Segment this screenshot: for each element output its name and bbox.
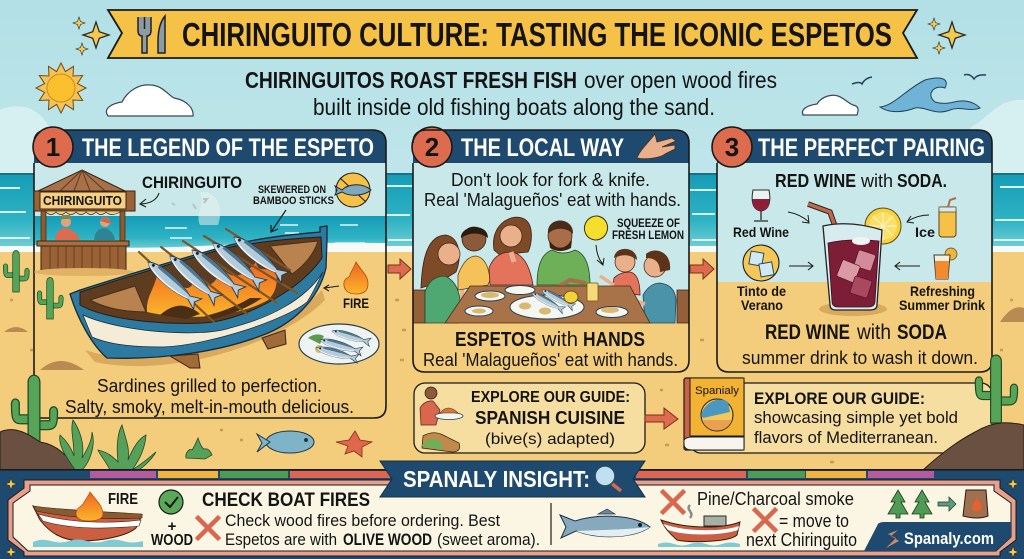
intro text: CHIRINGUITOS ROAST FRESH FISH xyxy=(245,67,577,93)
text: check boat fires: Check wood fires before ordering. Best xyxy=(225,511,500,530)
icon: fish in circle xyxy=(335,173,371,207)
icon: cloud right xyxy=(802,95,858,115)
icon: soda glass with straw xyxy=(939,198,956,237)
panel: the local way xyxy=(0,127,1024,559)
illustration: plate of sardines xyxy=(299,324,379,364)
arrow: orange drink to glass xyxy=(895,262,920,270)
icon: pine trees arrow and charcoal bag xyxy=(888,490,988,518)
icon: magnifier xyxy=(595,466,621,491)
text: check boat fires: (sweet aroma). xyxy=(437,530,540,549)
label: plus wood: WOOD xyxy=(151,532,193,549)
heading: number 2: 2 xyxy=(425,132,439,162)
heading: number 3: 3 xyxy=(725,132,739,162)
text: check boat fires: OLIVE WOOD xyxy=(343,530,432,549)
text: don't look for fork and knife: Real 'Malagueños' eat with hands. xyxy=(424,190,681,210)
label: squeeze of fresh lemon: FRESH LEMON xyxy=(612,228,684,242)
banner: spanaly insight: SPANALY INSIGHT: xyxy=(403,466,590,492)
label: skewered on bamboo sticks: SKEWERED ON xyxy=(258,184,326,196)
arrow: wine to glass xyxy=(788,212,809,223)
intro text: over open wood fires xyxy=(584,67,777,93)
illustration: chiringuito beach bar xyxy=(34,170,135,276)
heading: number 2 xyxy=(412,127,452,167)
icon: sparkles left xyxy=(73,17,109,55)
icon: hand xyxy=(637,134,676,159)
label: refreshing summer drink xyxy=(899,283,985,313)
text: move to next chiringuito: next Chiringuito xyxy=(746,530,857,550)
person: child in coral xyxy=(600,249,640,295)
text: red wine with soda: with xyxy=(860,171,893,191)
icon: cactus in panel xyxy=(37,277,63,319)
text: check boat fires xyxy=(202,490,540,549)
text: red wine with soda summary xyxy=(742,321,978,368)
icon: boat with fire xyxy=(33,492,143,547)
text: red wine with soda: SODA. xyxy=(897,171,947,191)
illustration: chiringuito beach bar: CHIRINGUITO xyxy=(43,193,122,208)
label: skewered on bamboo sticks: BAMBOO STICKS xyxy=(253,195,334,207)
text: explore our guide spanish cuisine: EXPLORE OUR GUIDE: xyxy=(471,389,630,406)
text: red wine with soda: RED WINE xyxy=(775,171,856,191)
panel text: sardines description: Sardines grilled to perfection. xyxy=(97,376,322,396)
text: don't look for fork and knife xyxy=(424,170,681,210)
icon: sardine xyxy=(560,509,650,538)
text: espetos with hands: ESPETOS xyxy=(455,329,536,351)
dune xyxy=(40,361,84,370)
arrow: panel 1 to panel 2 xyxy=(388,259,411,279)
text: explore our guide spanish cuisine: (bive(s) adapted) xyxy=(485,431,615,448)
icon: rock right xyxy=(923,423,1024,470)
icon: seaweed left xyxy=(60,420,212,472)
arrow: lemon to child xyxy=(596,245,604,265)
text: espetos with hands: Real 'Malagueños' eat with hands. xyxy=(423,350,678,370)
logo: spanaly.com: Spanaly.com xyxy=(904,529,994,548)
arrow: to fire xyxy=(324,285,339,291)
heading: the legend of the espeto: THE LEGEND OF THE ESPETO xyxy=(82,134,374,162)
heading: number 1: 1 xyxy=(46,132,60,162)
label: tinto de verano: Tinto de xyxy=(737,283,786,299)
intro text: built inside old fishing boats along the sand. xyxy=(313,94,715,120)
heading: the local way: THE LOCAL WAY xyxy=(461,134,624,162)
icon: red x pine xyxy=(663,492,683,512)
label: ice: Ice xyxy=(915,224,935,240)
label: plus wood: + xyxy=(168,518,177,535)
text: explore our guide spanish cuisine: SPANISH CUISINE xyxy=(475,408,625,428)
panel: the perfect pairing xyxy=(712,127,992,372)
banner: spanaly insight xyxy=(380,461,645,497)
label: chiringuito: CHIRINGUITO xyxy=(142,173,242,192)
heading: number 1 xyxy=(33,127,73,167)
icon: sun xyxy=(36,63,86,113)
text: explore our guide mediterranean: EXPLORE OUR GUIDE: xyxy=(754,389,925,408)
text: pine charcoal smoke: Pine/Charcoal smoke xyxy=(697,489,854,509)
icon: red x xyxy=(198,518,218,538)
icon: spanaly book: Spanialy xyxy=(695,385,740,397)
icon: spanaly book xyxy=(684,378,744,450)
person: boy in blue xyxy=(618,251,676,323)
icon: starfish xyxy=(336,431,372,457)
illustration: tinto de verano glass xyxy=(808,204,901,316)
icon: fire xyxy=(343,262,369,311)
title banner xyxy=(108,10,917,58)
arrow: ice to glass xyxy=(789,262,813,270)
label: plus wood xyxy=(151,518,193,549)
arrow: guide to book xyxy=(645,408,678,429)
icon: wave and birds xyxy=(852,74,986,112)
text: check boat fires: Espetos are with xyxy=(225,530,337,549)
icon: lemon xyxy=(581,213,611,243)
text: red wine with soda summary: summer drink to wash it down. xyxy=(742,348,978,368)
text: move to next chiringuito xyxy=(746,511,857,550)
person: boy in yellow xyxy=(458,227,490,290)
text: explore our guide mediterranean: flavors of Mediterranean. xyxy=(754,428,938,447)
label: red wine: Red Wine xyxy=(733,224,789,240)
panel text: sardines description xyxy=(65,376,354,417)
text: espetos with hands xyxy=(423,329,678,370)
label: squeeze of fresh lemon: SQUEEZE OF xyxy=(617,216,680,230)
text: explore our guide spanish cuisine xyxy=(471,389,630,448)
panel text: sardines description: Salty, smoky, melt-in-mouth delicious. xyxy=(65,397,354,417)
heading: number 3 xyxy=(712,127,752,167)
icon: fire: FIRE xyxy=(343,295,369,311)
text: move to next chiringuito: = move to xyxy=(779,511,849,531)
icon: sparkles right xyxy=(928,18,965,54)
icon: wine glass xyxy=(752,190,770,221)
arrow: panel 2 to panel 3 xyxy=(690,259,714,279)
text: explore our guide mediterranean xyxy=(754,389,958,447)
corner stars xyxy=(5,478,1019,558)
text: red wine with soda summary: SODA xyxy=(897,321,947,344)
intro text xyxy=(245,67,777,120)
person: woman in coral xyxy=(489,217,533,285)
text: check boat fires: CHECK BOAT FIRES xyxy=(202,490,370,511)
icon: person with plate xyxy=(420,387,463,452)
text: espetos with hands: with xyxy=(541,329,578,351)
label: refreshing summer drink: Summer Drink xyxy=(899,297,985,313)
text: red wine with soda xyxy=(775,171,947,191)
arrow: soda to glass xyxy=(907,215,929,223)
label: squeeze of fresh lemon xyxy=(612,216,684,242)
table with plates xyxy=(445,283,650,323)
illustration: family eating with hands xyxy=(413,213,689,323)
icon: small cactus left margin xyxy=(3,250,29,292)
arrow: to boat xyxy=(271,210,286,232)
logo: spanaly.com xyxy=(864,522,1011,551)
frame xyxy=(8,480,1016,556)
person: woman in green xyxy=(421,235,478,323)
text: red wine with soda summary: with xyxy=(856,321,891,344)
text: red wine with soda summary: RED WINE xyxy=(765,321,850,344)
icon: cloud left xyxy=(106,85,193,116)
icon: green check xyxy=(159,490,183,514)
label: tinto de verano xyxy=(737,283,786,313)
text: explore our guide mediterranean: showcasing simple yet bold xyxy=(754,408,958,427)
arrow: to bar xyxy=(140,193,159,207)
icon: red x move xyxy=(755,510,775,530)
icon: big cactus left xyxy=(11,375,58,449)
person: man in green xyxy=(537,220,590,288)
label: tinto de verano: Verano xyxy=(741,297,783,313)
colour strip xyxy=(90,471,934,478)
panel: guide box mediterranean xyxy=(690,383,992,453)
icon: fishing boat with smoke xyxy=(658,505,740,547)
bottom panel: spanaly insight xyxy=(0,461,1024,559)
illustration: fishing boat with grilling sardines xyxy=(70,226,327,368)
label: refreshing summer drink: Refreshing xyxy=(910,283,975,299)
label: fire: FIRE xyxy=(108,491,138,508)
icon: rock left xyxy=(0,430,78,470)
panel: guide box spanish cuisine xyxy=(414,383,645,453)
smoke and seagulls xyxy=(172,199,207,209)
icon: ice cubes xyxy=(743,245,779,281)
icon: big cactus right xyxy=(975,355,1018,423)
panel: the legend of the espeto xyxy=(33,127,386,418)
icon: fork and knife xyxy=(138,16,165,53)
label: skewered on bamboo sticks xyxy=(253,184,334,207)
text: don't look for fork and knife: Don't look for fork & knife. xyxy=(451,170,650,190)
icon: blue fish xyxy=(257,431,314,453)
icon: orange drink xyxy=(934,248,957,279)
text: espetos with hands: HANDS xyxy=(583,329,645,351)
